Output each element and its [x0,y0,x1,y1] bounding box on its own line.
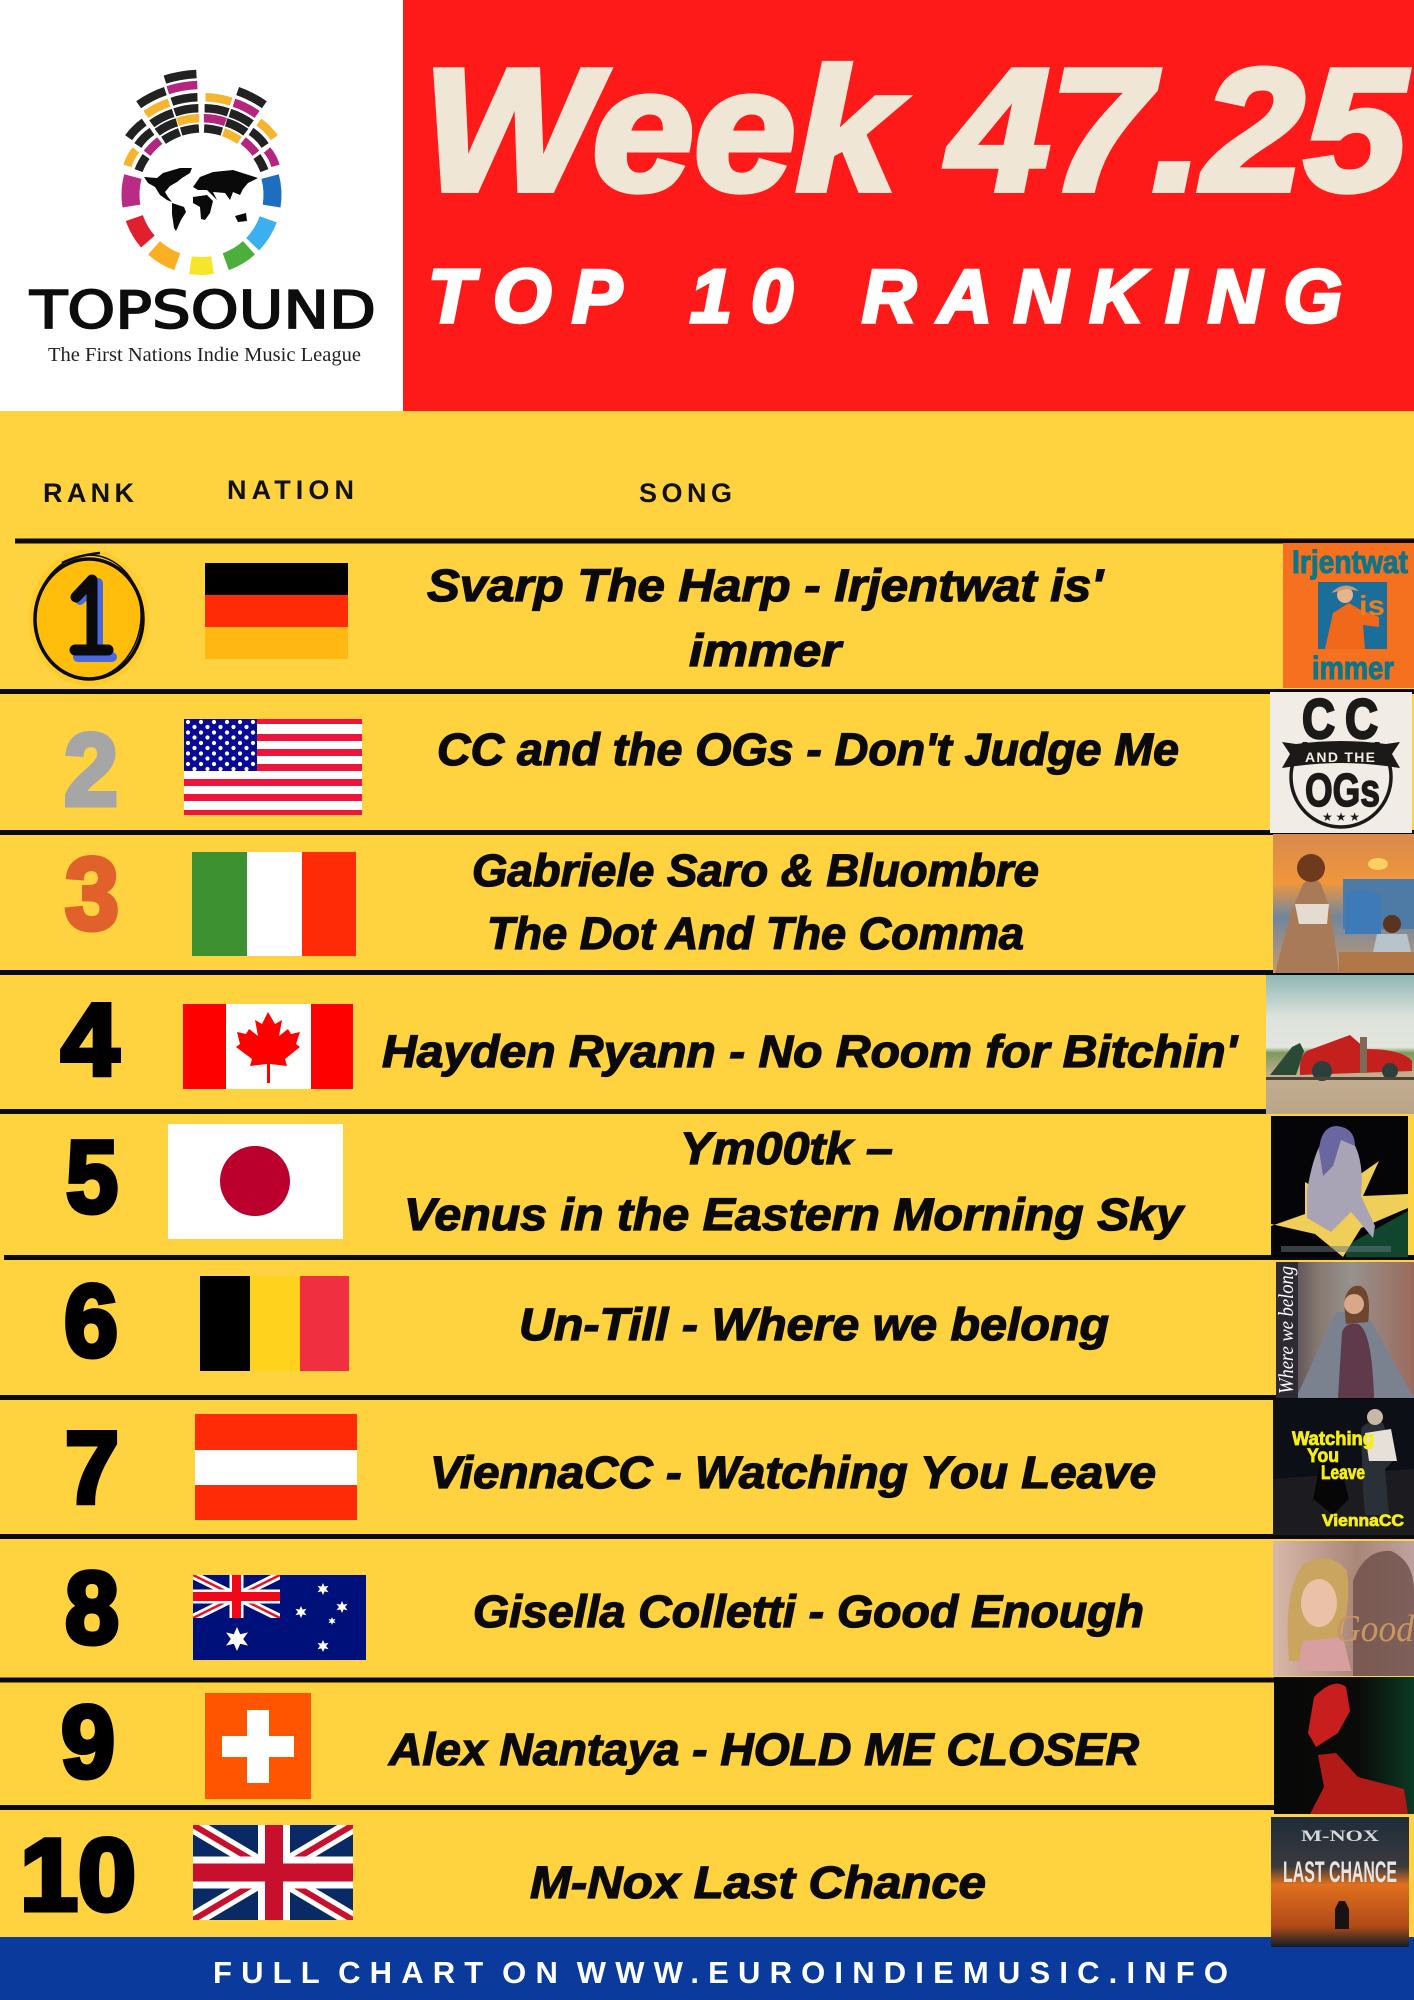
rank 4: 4 [61,983,119,1097]
song title 5: Ym00tk – [680,1123,893,1174]
flag: Germany [205,563,348,659]
icon: colour ring [131,177,272,266]
icon: equalizer arcs [127,73,276,171]
flag: Austria [195,1414,357,1520]
page background [0,411,1414,1937]
song title 3: The Dot And The Comma [487,908,1024,959]
song title 7: ViennaCC - Watching You Leave [430,1447,1156,1498]
song title 3 [472,845,1039,959]
flag: Canada [183,1004,353,1089]
row 2 [64,687,1412,833]
rank 5: 5 [66,1120,118,1234]
row 4 [61,975,1414,1114]
subheading [428,254,1342,338]
song title 9: Alex Nantaya - HOLD ME CLOSER [388,1724,1140,1775]
heading: week: Week 47.25 [423,32,1408,227]
album cover 2: AND THE [1305,749,1375,765]
song title 8: Gisella Colletti - Good Enough [473,1586,1144,1637]
song title 1: immer [689,625,844,676]
row 9 [61,1677,1414,1814]
album cover 2: ★★★ [1322,810,1360,824]
rank 10: 10 [20,1818,136,1932]
rank 6: 6 [64,1264,118,1378]
icon: world map [144,168,258,231]
logo wordmark: TOPSOUND [29,281,376,341]
album cover 9 [1274,1677,1414,1814]
logo tagline: The First Nations Indie Music League [48,344,361,366]
song title 10: M-Nox Last Chance [530,1857,986,1908]
album cover 3 [1273,834,1414,973]
album cover 2 [1270,687,1412,833]
album cover 2: OGs [1305,764,1380,816]
flag: Italy [192,852,356,956]
song title 4: Hayden Ryann - No Room for Bitchin' [382,1026,1238,1077]
footer text: FULL CHART ON WWW.EUROINDIEMUSIC.INFO [213,1955,1228,1990]
song title 1 [427,560,1104,676]
flag: UK [193,1825,353,1920]
rank 8: 8 [65,1551,119,1665]
song title 5 [404,1123,1185,1240]
subheading: 10 [690,254,793,338]
song title 5: Venus in the Eastern Morning Sky [404,1189,1185,1240]
flag: Belgium [200,1276,349,1371]
row 5 [66,1116,1408,1257]
rank 2: 2 [64,713,118,827]
song title 3: Gabriele Saro & Bluombre [472,845,1039,896]
album cover 10: M-NOX [1301,1828,1380,1845]
flag: Japan [168,1124,343,1239]
flag: USA [184,719,362,815]
row divider lines [0,538,1414,1810]
album cover 1: immer [1312,650,1394,686]
album cover 8 [1273,1541,1414,1676]
column headers: SONG [639,478,732,508]
row 8 [65,1541,1414,1676]
album cover 7: Leave [1321,1463,1365,1484]
row 7 [65,1399,1414,1535]
album cover 7: Watching [1292,1429,1374,1450]
panel: title [403,0,1414,411]
song title 1: Svarp The Harp - Irjentwat is' [427,560,1104,611]
album cover 6 [1274,1262,1414,1398]
rank 9: 9 [61,1685,115,1799]
album cover 1 [1283,543,1414,688]
rank badge 1 [29,550,149,686]
album cover 7: You [1307,1446,1339,1467]
song title 6: Un-Till - Where we belong [519,1299,1109,1350]
row 6 [64,1262,1414,1398]
rank 3: 3 [65,837,119,951]
flag: Australia [193,1575,366,1660]
row 10 [20,1817,1409,1947]
row 1 [29,543,1414,688]
rank 7: 7 [65,1411,119,1525]
album cover 2: C [1302,687,1335,750]
album cover 2: C [1345,687,1378,750]
album cover 5 [1271,1116,1408,1257]
album cover 7: ViennaCC [1322,1511,1404,1530]
column headers [43,475,732,508]
song title 2: CC and the OGs - Don't Judge Me [437,724,1179,775]
album cover 10 [1271,1817,1409,1947]
album cover 1: is [1359,590,1385,621]
footer band [0,1937,1414,2000]
album cover 7 [1273,1399,1414,1535]
album cover 4 [1266,975,1414,1114]
panel: logo [0,0,403,411]
flag: Switzerland [205,1693,311,1799]
subheading: RANKING [862,254,1342,338]
column headers: RANK [43,478,134,508]
row 3 [65,834,1414,973]
subheading: TOP [428,254,623,338]
column headers: NATION [227,475,354,505]
